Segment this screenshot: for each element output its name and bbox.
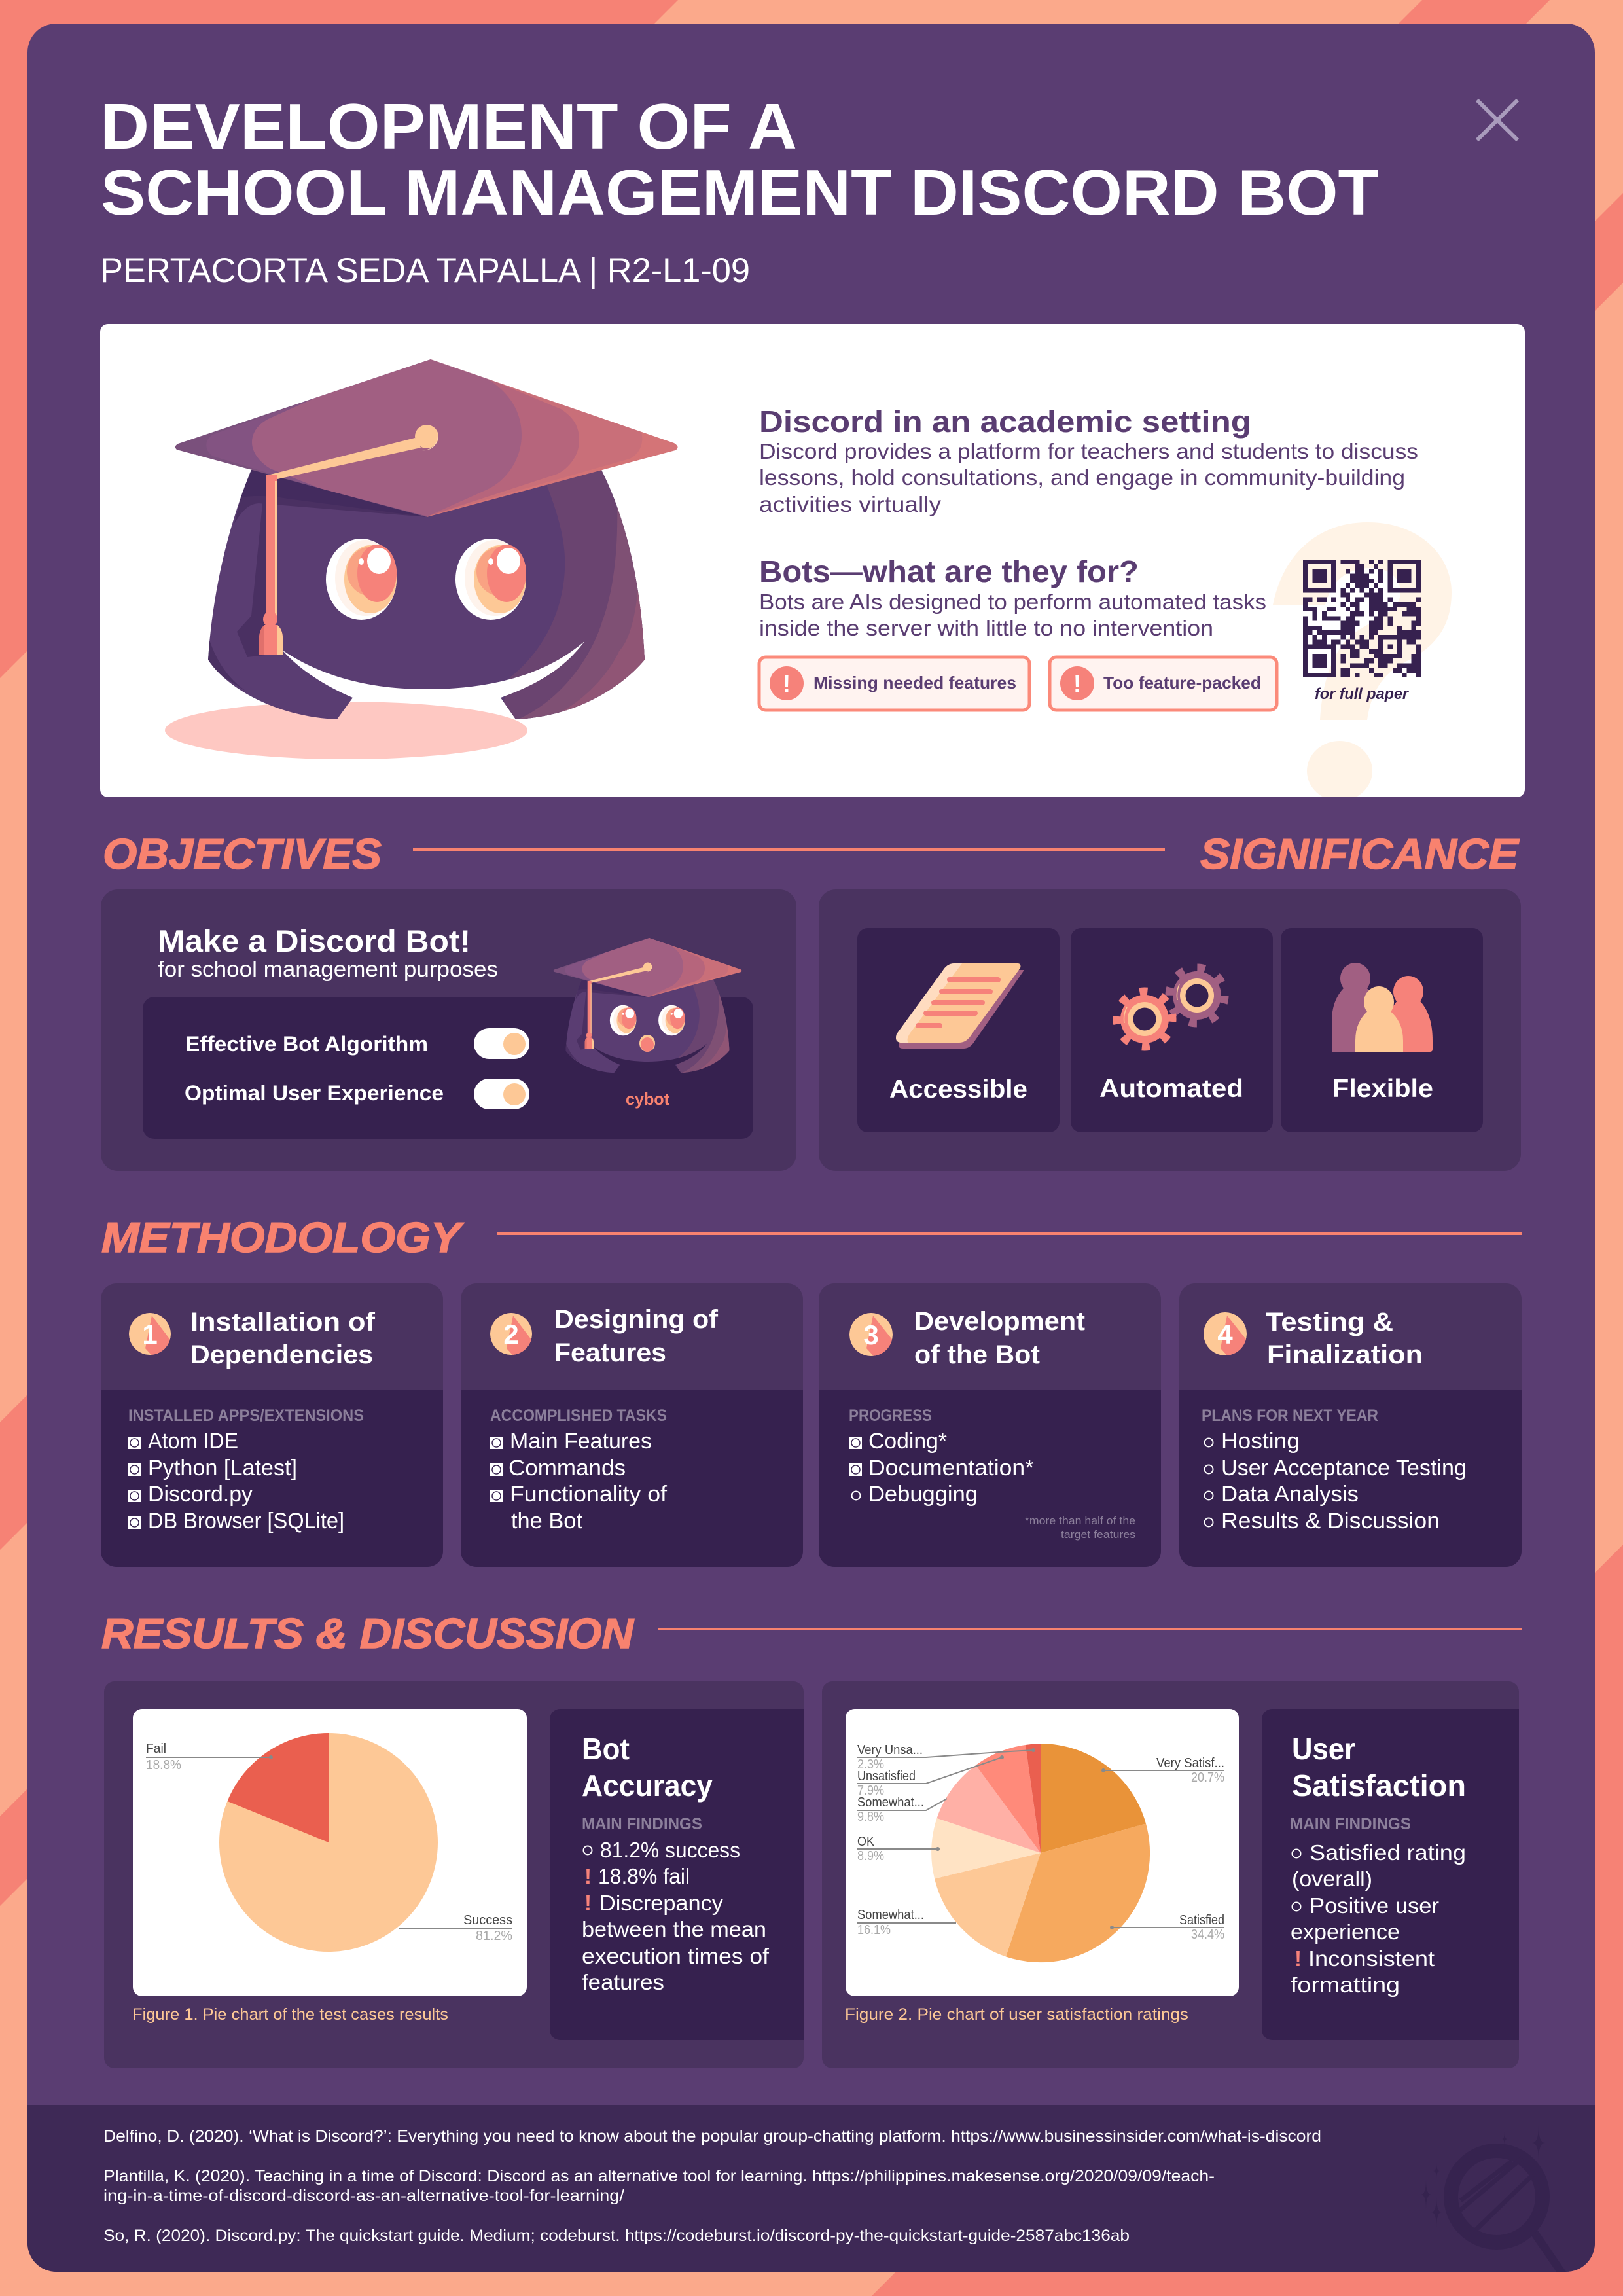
number badge 3: 3 [863, 1319, 879, 1350]
panel: references footer [27, 2105, 1595, 2272]
objective: Optimal User Experience [185, 1079, 529, 1109]
findings list: Inconsistent [1308, 1946, 1435, 1971]
label: Satisfied [1179, 1913, 1224, 1942]
panel: user satisfaction [822, 1681, 1519, 2068]
panel: bot accuracy findings [550, 1709, 804, 2040]
label: Success: 81.2% [476, 1929, 512, 1943]
authors subtitle: PERTACORTA SEDA TAPALLA | R2-L1-09 [100, 251, 750, 290]
label: Satisfied: Satisfied [1179, 1913, 1224, 1928]
step 2 list heading: ACCOMPLISHED TASKS [490, 1407, 667, 1425]
label: Unsatisfied [857, 1769, 916, 1798]
findings list: 18.8% fail [598, 1864, 690, 1888]
card: step 1 Installation of Dependencies [101, 1283, 443, 1567]
reference: Delfino: Delfino, D. (2020). ‘What is Discord?’: Everything you need to know about the popular group-chatting platform. https://www.businessinsider.com/what-is-discord [103, 2127, 1321, 2145]
panel: bot accuracy [104, 1681, 804, 2068]
question mark watermark [1273, 522, 1452, 801]
objectives heading: Make a Discord Bot! [158, 924, 471, 958]
findings heading [582, 1732, 713, 1803]
step 2 list: Main Features [510, 1429, 652, 1454]
step 3 footnote: target features [1061, 1528, 1135, 1541]
findings list: ! [584, 1891, 592, 1915]
step 4 list [1204, 1429, 1467, 1534]
findings list: execution times of [582, 1944, 770, 1968]
card: Flexible [1281, 928, 1483, 1132]
chart: pie chart of test cases [133, 1709, 527, 1996]
label: OK [857, 1835, 884, 1863]
objective: Effective Bot Algorithm: Effective Bot Algorithm [185, 1032, 428, 1056]
findings heading: User [1292, 1732, 1355, 1766]
QR caption: for full paper [1315, 685, 1410, 703]
findings list: ! [584, 1864, 592, 1888]
step 3 footnote: *more than half of the [1025, 1515, 1135, 1527]
label: Somewhat Satisfied: Somewhat... [857, 1908, 924, 1922]
step 4 title: Testing & [1266, 1308, 1393, 1336]
label: Fail [146, 1742, 273, 1772]
step 2 list: Functionality of [510, 1482, 668, 1507]
number badge 3 [849, 1313, 893, 1356]
heading: Bots: Bots—what are they for? [759, 554, 1139, 588]
cybot label: cybot [626, 1089, 669, 1109]
icon: gears [1117, 968, 1224, 1047]
card: Automated [1071, 928, 1273, 1132]
heading: Discord in an academic setting: Discord in an academic setting [759, 404, 1251, 439]
reference: Plantilla: Plantilla, K. (2020). Teaching in a time of Discord: Discord as an alternative tool for learning. https://philippines.makesense.org/2020/09/09/teach- [103, 2167, 1215, 2185]
findings list [582, 1838, 770, 1994]
text block: Discord description [759, 439, 1418, 516]
callout: Missing needed features: ! [783, 670, 791, 697]
findings list: 81.2% success [600, 1838, 740, 1862]
icon: document [896, 963, 1024, 1049]
step 4 list heading: PLANS FOR NEXT YEAR [1202, 1407, 1378, 1425]
findings list: features [582, 1970, 664, 1994]
text block: Discord description: lessons, hold consultations, and engage in community-building [759, 465, 1405, 490]
objectives inner panel [143, 997, 753, 1139]
step 2 title: Designing of [554, 1305, 719, 1334]
label: OK: OK [857, 1835, 875, 1849]
step 3 list: Coding* [868, 1429, 947, 1454]
reference: Plantilla [103, 2167, 1215, 2205]
heading: Objectives: OBJECTIVES [103, 830, 382, 878]
findings heading: Accuracy [582, 1768, 713, 1803]
callout: Missing needed features: Missing needed features [813, 673, 1016, 692]
card: step 4 Testing and Finalization [1179, 1283, 1522, 1567]
main findings label: MAIN FINDINGS [1290, 1815, 1411, 1833]
mascot shadow [165, 702, 527, 759]
step 1 list heading: INSTALLED APPS/EXTENSIONS [128, 1407, 364, 1425]
card: step 2 Designing of Features [461, 1283, 803, 1567]
number badge 4 [1204, 1312, 1247, 1355]
panel: significance [819, 889, 1521, 1171]
step 3 title [914, 1307, 1085, 1369]
label: Very Satisfied: 20.7% [1191, 1770, 1224, 1785]
step 1 list: Atom IDE [148, 1429, 238, 1454]
step 4 list: Results & Discussion [1221, 1509, 1440, 1534]
findings list [1291, 1840, 1466, 1997]
step 1 list: Python [Latest] [148, 1456, 297, 1480]
findings list: Positive user [1310, 1893, 1439, 1918]
step 3 title: Development [914, 1307, 1085, 1336]
label: Success [399, 1913, 512, 1943]
number badge 2 [490, 1313, 532, 1355]
illustration: Discord mascot with graduation cap [175, 359, 678, 726]
objectives subheading: for school management purposes [158, 957, 498, 981]
callout: Too feature-packed: ! [1073, 670, 1081, 697]
callout: Too feature-packed [1050, 657, 1277, 710]
text block: Bots description: Bots are AIs designed to perform automated tasks [759, 590, 1266, 614]
chart: pie chart of user satisfaction [846, 1709, 1239, 1996]
step 4 list: Data Analysis [1221, 1482, 1359, 1507]
step 3 list [849, 1429, 1034, 1507]
number badge 4: 4 [1217, 1319, 1233, 1350]
text block: Bots description [759, 590, 1266, 640]
title [100, 90, 1379, 228]
findings heading [1292, 1732, 1466, 1803]
findings list: ! [1294, 1946, 1302, 1971]
figure 2 caption: Figure 2. Pie chart of user satisfaction ratings [845, 2005, 1188, 2024]
label: Very Satisfied: Very Satisf... [1156, 1756, 1224, 1770]
leader lines [857, 1748, 1224, 1929]
reference: So: So, R. (2020). Discord.py: The quickstart guide. Medium; codeburst. https://codeburst.io/discord-py-the-quickstart-guide-2587abc136ab [103, 2227, 1130, 2245]
step 3 title: of the Bot [914, 1340, 1040, 1369]
step 2 title [554, 1305, 719, 1367]
step 1 title: Dependencies [190, 1340, 373, 1369]
icon: magnifying glass with sparkles [1421, 2126, 1566, 2272]
findings heading: Bot [582, 1732, 630, 1766]
label: Automated: Automated [1099, 1075, 1243, 1103]
label: Somewhat Unsatisfied: 9.8% [857, 1810, 884, 1824]
step 4 title [1266, 1308, 1423, 1369]
findings list: formatting [1291, 1973, 1400, 1997]
findings list: between the mean [582, 1917, 766, 1941]
step 2 title: Features [554, 1338, 666, 1367]
label: Unsatisfied: Unsatisfied [857, 1769, 916, 1784]
number badge 1 [129, 1313, 171, 1355]
step 3 footnote [1025, 1515, 1135, 1541]
illustration: cybot mascot [554, 938, 741, 1075]
label: Fail: 18.8% [146, 1758, 181, 1772]
label: Very Unsatisfied [857, 1743, 923, 1772]
label: Somewhat Unsatisfied [857, 1795, 924, 1824]
title: SCHOOL MANAGEMENT DISCORD BOT [101, 156, 1379, 228]
findings heading: Satisfaction [1292, 1768, 1466, 1803]
icon: close X [1477, 100, 1518, 140]
findings list: Satisfied rating [1310, 1840, 1466, 1865]
label: Accessible: Accessible [889, 1075, 1027, 1103]
step 3 list: Documentation* [868, 1456, 1034, 1480]
findings list: Discrepancy [599, 1891, 724, 1915]
step 2 list [490, 1429, 668, 1534]
label: Unsatisfied: 7.9% [857, 1784, 884, 1798]
label: Somewhat Unsatisfied: Somewhat... [857, 1795, 924, 1810]
panel: introduction card [100, 324, 1525, 801]
step 2 list: the Bot [511, 1509, 583, 1534]
objective: Effective Bot Algorithm [185, 1028, 529, 1059]
step 3 list: Debugging [868, 1482, 978, 1507]
reference: Plantilla: ing-in-a-time-of-discord-discord-as-an-alternative-tool-for-learning/ [103, 2187, 624, 2205]
number badge 2: 2 [503, 1319, 519, 1350]
step 3 list heading: PROGRESS [849, 1407, 932, 1425]
label: Very Unsatisfied: 2.3% [857, 1757, 884, 1772]
label: OK: 8.9% [857, 1849, 884, 1863]
label: Fail: Fail [146, 1742, 166, 1756]
label: Somewhat Satisfied: 16.1% [857, 1923, 891, 1937]
panel: user satisfaction findings [1262, 1709, 1519, 2040]
text block: Discord description: activities virtually [759, 492, 942, 516]
step 1 title [190, 1308, 376, 1369]
step 1 list: Discord.py [148, 1482, 253, 1507]
label: Somewhat Satisfied [857, 1908, 924, 1937]
findings list: experience [1291, 1920, 1400, 1944]
step 4 list: User Acceptance Testing [1221, 1456, 1467, 1480]
label: Success: Success [463, 1913, 512, 1928]
findings list: (overall) [1292, 1867, 1372, 1891]
step 4 title: Finalization [1267, 1340, 1423, 1369]
card: step 3 Development of the Bot [819, 1283, 1161, 1567]
label: Very Unsatisfied: Very Unsa... [857, 1743, 923, 1757]
heading: Significance: SIGNIFICANCE [1200, 830, 1520, 878]
card: Accessible [857, 928, 1060, 1132]
step 2 list: Commands [508, 1456, 626, 1480]
heading: Methodology: METHODOLOGY [101, 1213, 465, 1261]
label: Very Satisfied [1156, 1756, 1224, 1785]
heading: Results and Discussion: RESULTS & DISCUSSION [101, 1609, 635, 1657]
step 1 title: Installation of [190, 1308, 376, 1336]
text block: Discord description: Discord provides a platform for teachers and students to discuss [759, 439, 1418, 463]
step 1 list [128, 1429, 344, 1534]
figure 1 caption: Figure 1. Pie chart of the test cases results [132, 2005, 448, 2024]
callout: Missing needed features [759, 657, 1029, 710]
QR code [1303, 560, 1421, 677]
label: Flexible: Flexible [1332, 1075, 1433, 1103]
objective: Optimal User Experience: Optimal User Experience [185, 1081, 444, 1105]
callout: Too feature-packed: Too feature-packed [1103, 673, 1261, 692]
text block: Bots description: inside the server with little to no intervention [759, 616, 1213, 640]
main findings label: MAIN FINDINGS [582, 1815, 702, 1833]
label: Satisfied: 34.4% [1191, 1928, 1224, 1942]
title: DEVELOPMENT OF A [100, 90, 797, 162]
icon: people [1332, 963, 1433, 1052]
panel: objectives [101, 889, 796, 1171]
step 1 list: DB Browser [SQLite] [148, 1509, 344, 1534]
step 4 list: Hosting [1221, 1429, 1300, 1454]
number badge 1: 1 [142, 1319, 158, 1350]
